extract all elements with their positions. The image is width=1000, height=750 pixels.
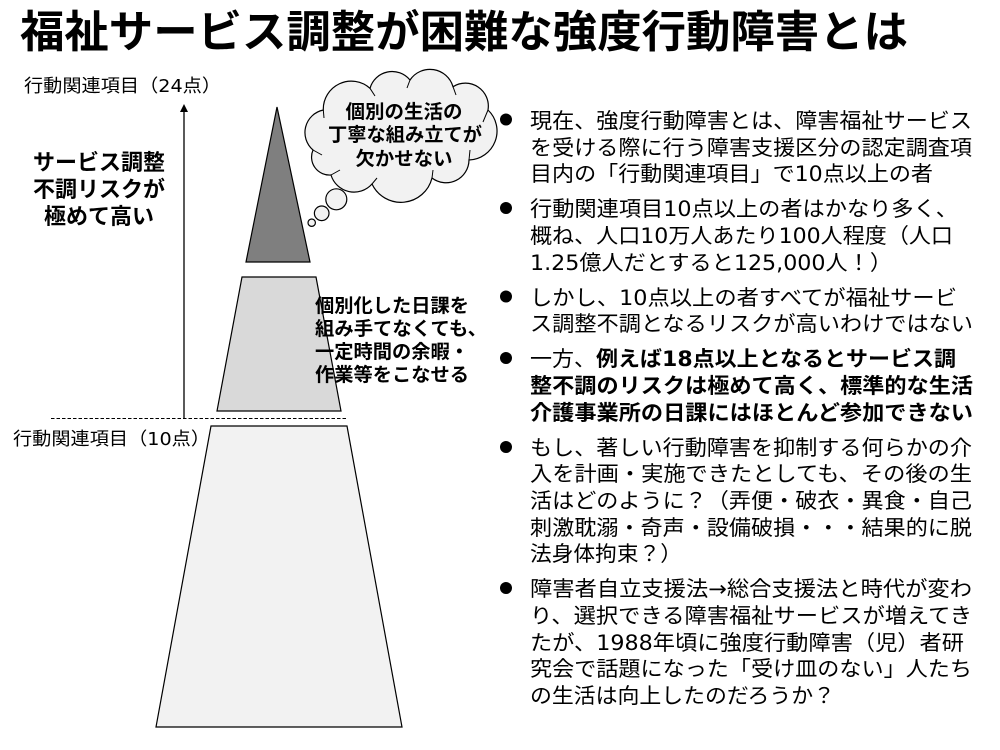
text: high risk: 極めて高い (44, 205, 154, 230)
label: 10 points: 行動関連項目（10点） (13, 429, 210, 450)
text: middle tier (315, 295, 487, 386)
threshold dashed line (51, 418, 346, 420)
pyramid bottom (156, 426, 402, 727)
bullet 5 (500, 436, 972, 566)
bullet 6: 究会で話題になった「受け皿のない」人たち (530, 657, 972, 681)
bullet 6: たが、1988年頃に強度行動障害（児）者研 (530, 631, 964, 655)
bullet 2: 概ね、人口10万人あたり100人程度（人口 (530, 224, 953, 248)
text: high risk: 不調リスクが (33, 177, 165, 203)
callout: thought cloud: 個別の生活の (346, 101, 462, 123)
label: 24 points: 行動関連項目（24点） (24, 76, 221, 97)
bullet 5: 活はどのように？（弄便・破衣・異食・自己 (530, 489, 972, 513)
bullet 3 (500, 286, 973, 336)
bullet 6 (500, 577, 972, 708)
pyramid top (246, 107, 310, 262)
bullet 2 (500, 197, 958, 275)
text: high risk: サービス調整 (33, 151, 165, 176)
bullet 5: 入を計画・実施できたとしても、その後の生 (530, 462, 972, 486)
callout: thought cloud: 欠かせない (356, 147, 452, 170)
bullet 1 (500, 109, 972, 186)
bullet 2: 行動関連項目10点以上の者はかなり多く、 (530, 197, 958, 221)
bullet 3: しかし、10点以上の者すべてが福祉サービ (530, 286, 957, 310)
text: middle tier: 個別化した日課を (315, 295, 469, 317)
bullet 5: 法身体拘束？） (530, 542, 682, 566)
text: high risk (33, 151, 165, 230)
callout: thought cloud (305, 69, 497, 226)
bullet 5: もし、著しい行動障害を抑制する何らかの介 (530, 436, 972, 460)
text: middle tier: 一定時間の余暇・ (315, 341, 469, 363)
bullet 1: を受ける際に行う障害支援区分の認定調査項 (530, 136, 972, 160)
bullet 4: 整不調のリスクは極めて高く、標準的な生活 (530, 374, 973, 398)
bullet 1: 目内の「行動関連項目」で10点以上の者 (530, 162, 933, 186)
bullet 5: 刺激耽溺・奇声・設備破損・・・結果的に脱 (530, 516, 972, 540)
bullet 6: り、選択できる障害福祉サービスが増えてき (530, 604, 972, 628)
title: 福祉サービス調整が困難な強度行動障害とは (20, 7, 908, 58)
text: middle tier: 作業等をこなせる (315, 364, 469, 386)
bullet 6: の生活は向上したのだろうか？ (530, 684, 835, 708)
text: middle tier: 組み手てなくても、 (315, 318, 487, 340)
arrow: risk axis (180, 104, 188, 418)
bullet 1: 現在、強度行動障害とは、障害福祉サービス (530, 109, 972, 133)
bullet 4: 介護事業所の日課にはほとんど参加できない (530, 401, 973, 425)
bullet 4 (500, 347, 973, 425)
bullet 2: 1.25億人だとすると125,000人！） (530, 251, 892, 275)
bullet 3: ス調整不調となるリスクが高いわけではない (530, 312, 973, 336)
bullet 4: 一方、例えば18点以上となるとサービス調 (530, 347, 956, 371)
bullet 6: 障害者自立支援法→総合支援法と時代が変わ (530, 577, 972, 601)
pyramid middle (217, 277, 341, 411)
callout: thought cloud: 丁寧な組み立てが (328, 123, 482, 146)
bullet list (500, 109, 973, 708)
